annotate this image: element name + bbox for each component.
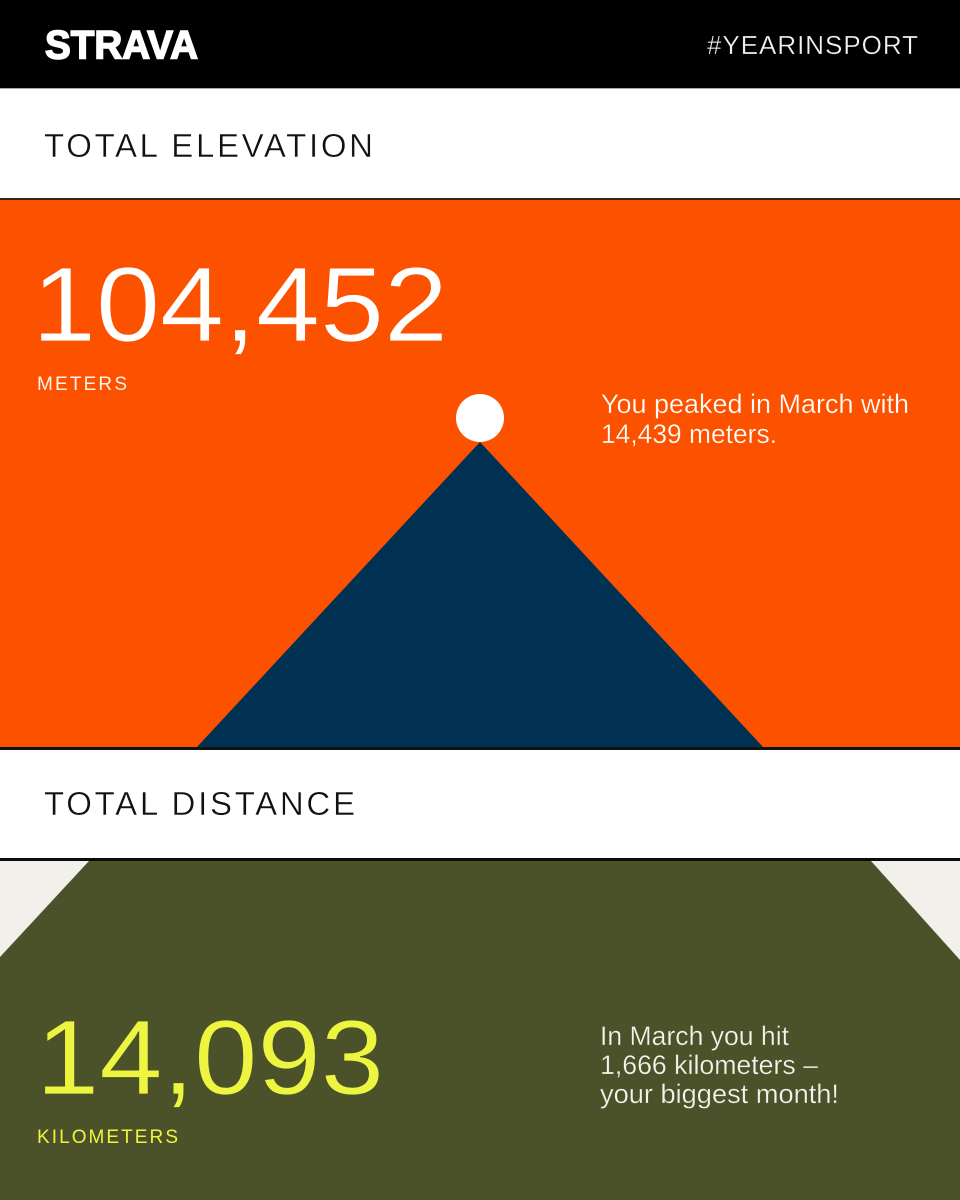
elevation unit: METERS [37, 374, 127, 395]
icon: mountain [197, 442, 763, 747]
distance unit: KILOMETERS [37, 1127, 178, 1148]
distance callout: your biggest month! [600, 1079, 839, 1109]
panel: distance [0, 858, 960, 1200]
elevation callout [601, 389, 909, 449]
elevation total number: 104,452 [32, 246, 448, 364]
distance callout: 1,666 kilometers – [600, 1050, 818, 1080]
green road shape [0, 861, 960, 1200]
distance total number: 14,093 [36, 999, 384, 1117]
distance callout [600, 1021, 839, 1109]
header bar [0, 0, 960, 89]
elevation callout: 14,439 meters. [601, 419, 777, 449]
elevation callout: You peaked in March with [601, 389, 909, 419]
hashtag: #YEARINSPORT [707, 30, 918, 60]
icon: peak marker [456, 394, 504, 442]
heading: total distance [0, 747, 960, 858]
heading: total distance: TOTAL DISTANCE [44, 785, 355, 822]
logo: Strava wordmark: STRAVA [45, 24, 198, 68]
distance callout: In March you hit [600, 1021, 789, 1051]
heading: total elevation [0, 89, 960, 198]
heading: total elevation: TOTAL ELEVATION [44, 127, 373, 164]
panel: elevation [0, 198, 960, 747]
